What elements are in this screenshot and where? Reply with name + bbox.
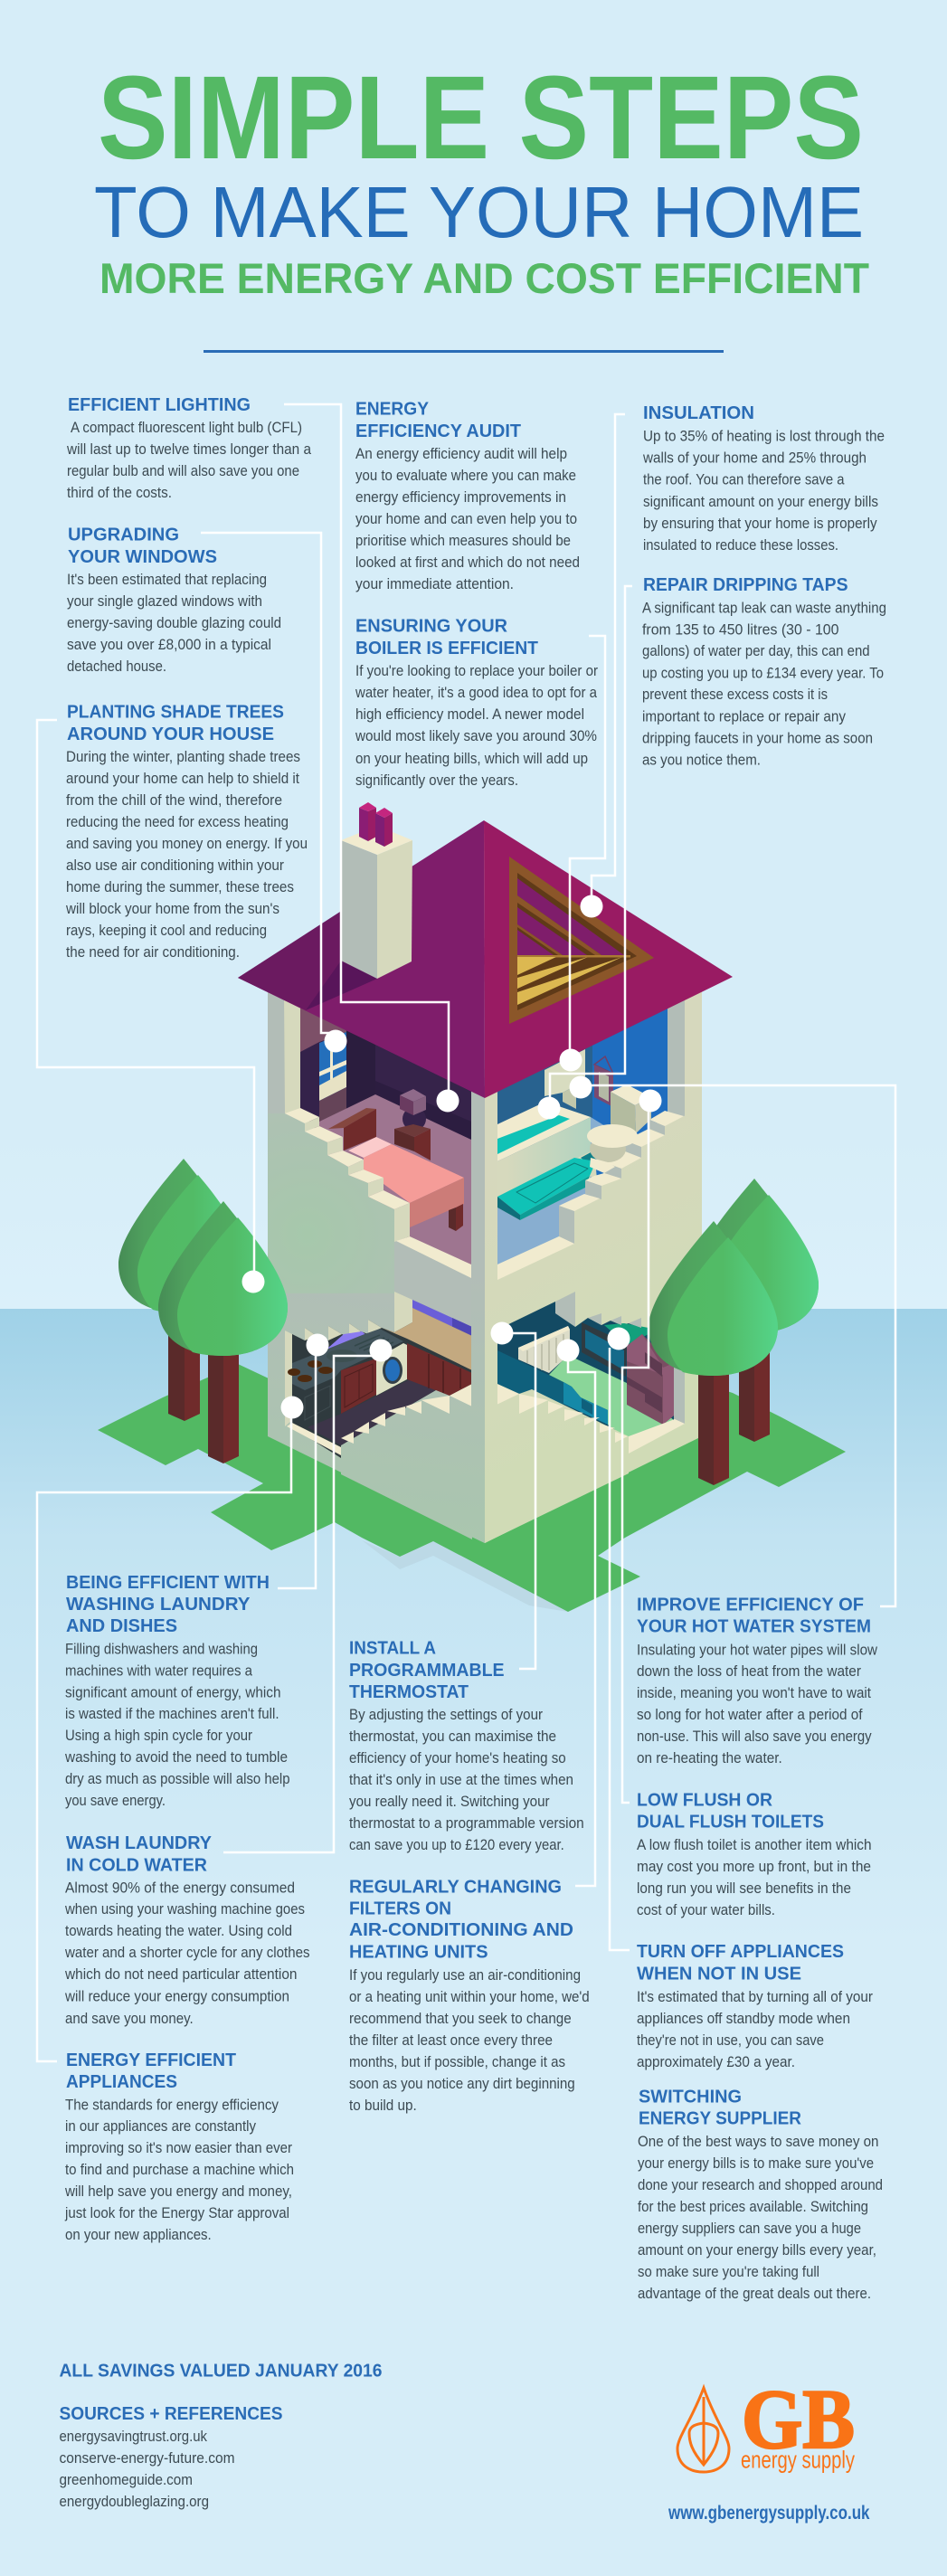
connector lines <box>37 404 895 2061</box>
wall picture <box>594 1056 613 1107</box>
body <box>637 1836 872 1918</box>
icon: flame leaf <box>677 2388 729 2472</box>
body: the need for air conditioning. <box>66 943 240 961</box>
body: thermostat, you can maximise the <box>349 1728 556 1745</box>
body: Almost 90% of the energy consumed <box>65 1880 295 1896</box>
heading: LOW FLUSH OR <box>637 1790 773 1810</box>
body: It's estimated that by turning all of your <box>637 1988 873 2005</box>
body: your energy bills is to make sure you've <box>638 2155 874 2172</box>
kitchen, lower left room <box>285 1292 472 1458</box>
heading: ENSURING YOUR <box>355 617 508 637</box>
house walls <box>268 986 702 1543</box>
body: save you over £8,000 in a typical <box>67 636 271 653</box>
heading: REGULARLY CHANGING <box>349 1878 562 1898</box>
body: the filter at least once every three <box>349 2031 553 2049</box>
body: energy-saving double glazing could <box>67 614 281 631</box>
heading <box>68 525 217 567</box>
toilet <box>587 1084 651 1173</box>
body: to find and purchase a machine which <box>65 2161 294 2178</box>
text block: install a programmable thermostat <box>349 1639 584 1853</box>
body: and save you money. <box>65 2010 194 2027</box>
body: If you're looking to replace your boiler or <box>355 662 598 679</box>
GB Energy Supply logo <box>677 2373 855 2474</box>
heading: IMPROVE EFFICIENCY OF <box>637 1596 864 1615</box>
heading: INSULATION <box>643 403 754 423</box>
body: for the best prices available. Switching <box>638 2198 868 2215</box>
body: energy suppliers can save you a huge <box>638 2220 861 2237</box>
body: significantly over the years. <box>355 772 518 789</box>
body: soon as you notice any dirt beginning <box>349 2075 575 2092</box>
heading <box>67 703 284 744</box>
upper left wall mask <box>268 1113 471 1293</box>
body <box>64 2096 294 2243</box>
ground shadow <box>362 1540 568 1612</box>
curtain <box>346 1029 375 1111</box>
body: by ensuring that your home is properly <box>643 515 877 532</box>
heading <box>355 617 538 658</box>
body: on your heating bills, which will add up <box>355 750 588 767</box>
heading <box>66 1573 270 1636</box>
heading: SWITCHING <box>639 2087 742 2107</box>
website url: www.gbenergysupply.co.uk <box>668 2503 870 2524</box>
body: will last up to twelve times longer than a <box>66 440 311 458</box>
body: so make sure you're taking full <box>638 2263 819 2280</box>
logo letters: GB <box>742 2373 855 2467</box>
heading <box>637 1942 844 1984</box>
body: so long for hot water after a period of <box>637 1706 863 1723</box>
body: During the winter, planting shade trees <box>66 748 300 765</box>
body: significant amount of energy, which <box>65 1684 280 1700</box>
body: Up to 35% of heating is lost through the <box>643 427 885 445</box>
sources heading: SOURCES + REFERENCES <box>60 2404 282 2424</box>
body: high efficiency model. A newer model <box>355 706 584 723</box>
bedside table <box>394 1124 431 1160</box>
text block: improve efficiency of your hot water system <box>637 1596 878 1766</box>
text block: upgrading your windows <box>67 525 281 675</box>
body: energy efficiency improvements in <box>355 488 566 506</box>
connector end dots <box>242 895 662 1418</box>
body: prioritise which measures should be <box>355 532 571 549</box>
heading <box>637 1790 824 1833</box>
body: A low flush toilet is another item which <box>637 1836 872 1853</box>
heading: EFFICIENT LIGHTING <box>68 395 251 415</box>
chimney pot right <box>375 808 393 847</box>
body: One of the best ways to save money on <box>638 2133 879 2150</box>
source list: energysavingtrust.org.uk <box>60 2428 207 2445</box>
tree: front right <box>649 1221 778 1485</box>
body: inside, meaning you won't have to wait <box>637 1684 871 1701</box>
body: approximately £30 a year. <box>637 2053 795 2070</box>
body: advantage of the great deals out there. <box>638 2285 871 2302</box>
body: down the loss of heat from the water <box>637 1662 861 1680</box>
heading: HEATING UNITS <box>349 1943 488 1963</box>
bedroom, upper left room <box>300 995 471 1266</box>
kitchen floor <box>308 1379 436 1445</box>
body: cost of your water bills. <box>637 1901 775 1918</box>
heading: ENERGY SUPPLIER <box>639 2108 802 2128</box>
body: towards heating the water. Using cold <box>65 1922 292 1939</box>
text block: efficient lighting <box>66 395 311 501</box>
body: would most likely save you around 30% <box>355 727 597 744</box>
living room, lower right room <box>497 1292 685 1454</box>
body: efficiency of your home's heating so <box>349 1749 566 1766</box>
body: from 135 to 450 litres (30 - 100 <box>642 620 839 639</box>
heading: ENERGY EFFICIENT <box>66 2050 236 2070</box>
body <box>349 1706 584 1853</box>
body: you save energy. <box>65 1792 166 1809</box>
body: or a heating unit within your home, we'd <box>349 1988 590 2005</box>
body: up costing you up to £134 every year. To <box>642 664 884 682</box>
body: appliances off standby mode when <box>637 2010 850 2027</box>
source list: energydoubleglazing.org <box>60 2493 209 2510</box>
body: on your new appliances. <box>65 2226 212 2243</box>
heading: IN COLD WATER <box>66 1856 208 1876</box>
heading: WHEN NOT IN USE <box>637 1965 801 1984</box>
heading: WASHING LAUNDRY <box>66 1595 251 1615</box>
tree: front left <box>158 1201 288 1463</box>
body <box>349 1966 590 2114</box>
washing machine <box>376 1343 407 1396</box>
body: third of the costs. <box>67 484 172 501</box>
body: water heater, it's a good idea to opt for a <box>355 684 597 701</box>
source list: conserve-energy-future.com <box>60 2449 235 2467</box>
body: washing to avoid the need to tumble <box>64 1748 288 1766</box>
savings date note: ALL SAVINGS VALUED JANUARY 2016 <box>60 2362 382 2382</box>
body: Using a high spin cycle for your <box>65 1727 252 1744</box>
heading: PLANTING SHADE TREES <box>67 703 284 723</box>
shelving unit <box>627 1334 674 1425</box>
tree: back right <box>689 1179 819 1442</box>
body: when using your washing machine goes <box>64 1900 305 1918</box>
body: insulated to reduce these losses. <box>643 536 838 554</box>
stepped wall edges <box>285 1108 684 1280</box>
body: A compact fluorescent light bulb (CFL) <box>71 419 302 436</box>
bed <box>328 1108 464 1231</box>
chimney <box>341 802 412 979</box>
body: to build up. <box>349 2097 417 2114</box>
body: significant amount on your energy bills <box>643 493 878 510</box>
text block: turn off appliances when not in use <box>637 1942 873 2070</box>
window <box>319 1032 346 1102</box>
body: reducing the need for excess heating <box>66 813 289 830</box>
chimney pot left <box>359 802 376 841</box>
body: they're not in use, you can save <box>637 2031 824 2049</box>
text block: ensuring your boiler is efficient <box>355 617 598 789</box>
tree: back left <box>118 1159 248 1421</box>
body <box>64 1641 289 1809</box>
roof skylight window <box>509 857 654 1024</box>
body: will block your home from the sun's <box>65 900 279 917</box>
body: Filling dishwashers and washing <box>65 1641 258 1658</box>
heading <box>637 1596 871 1637</box>
text block: switching energy supplier <box>638 2087 883 2302</box>
body: done your research and shopped around <box>638 2176 883 2193</box>
body: An energy efficiency audit will help <box>355 445 567 462</box>
text block: low flush or dual flush toilets <box>637 1790 872 1918</box>
body: Insulating your hot water pipes will slow <box>637 1641 878 1658</box>
body: long run you will see benefits in the <box>637 1880 851 1897</box>
body: is wasted if the machines aren't full. <box>65 1705 279 1722</box>
body: looked at first and which do not need <box>355 554 580 571</box>
title line 2: TO MAKE YOUR HOME <box>94 172 864 252</box>
body: dripping faucets in your home as soon <box>642 729 873 747</box>
lamp <box>400 1089 426 1131</box>
body: A significant tap leak can waste anything <box>642 599 886 617</box>
body <box>637 1988 873 2070</box>
title line 1: SIMPLE STEPS <box>98 51 864 184</box>
body: If you regularly use an air-conditioning <box>349 1966 581 1984</box>
heading <box>66 2050 236 2092</box>
source list: greenhomeguide.com <box>60 2471 193 2488</box>
body: that it's only in use at the times when <box>349 1771 573 1788</box>
body: also use air conditioning within your <box>66 857 284 874</box>
television <box>582 1322 627 1377</box>
body: your single glazed windows with <box>67 592 262 610</box>
body: rays, keeping it cool and reducing <box>66 922 267 939</box>
body <box>638 2133 883 2302</box>
text block: energy efficiency audit <box>355 400 580 592</box>
body: By adjusting the settings of your <box>349 1706 543 1723</box>
heading: BOILER IS EFFICIENT <box>355 639 538 658</box>
heading: PROGRAMMABLE <box>349 1661 505 1681</box>
roof <box>238 820 733 1098</box>
bath tub front <box>497 1151 596 1220</box>
body: may cost you more up front, but in the <box>637 1858 871 1875</box>
body: around your home can help to shield it <box>66 770 299 787</box>
body: non-use. This will also save you energy <box>637 1728 872 1745</box>
body: from the chill of the wind, therefore <box>66 791 282 809</box>
text block: planting shade trees <box>65 703 308 961</box>
title line 3: MORE ENERGY AND COST EFFICIENT <box>99 255 869 303</box>
source list <box>60 2428 235 2510</box>
body <box>642 599 886 769</box>
isometric house illustration <box>98 802 846 1612</box>
text block: being efficient with washing laundry and dishes <box>64 1573 289 1809</box>
body: will reduce your energy consumption <box>64 1988 289 2004</box>
body: thermostat to a programmable version <box>349 1814 584 1832</box>
heading <box>639 2087 802 2128</box>
heading: AND DISHES <box>66 1616 177 1636</box>
body: you really need it. Switching your <box>349 1793 550 1810</box>
heading: WASH LAUNDRY <box>66 1833 213 1853</box>
body: just look for the Energy Star approval <box>64 2204 289 2221</box>
body: recommend that you seek to change <box>349 2010 572 2027</box>
body: will help save you energy and money, <box>64 2183 292 2200</box>
body: your immediate attention. <box>355 575 514 592</box>
body: the roof. You can therefore save a <box>643 470 845 488</box>
kitchen cabinets <box>407 1343 472 1396</box>
grey inner wall below bedroom <box>394 1242 472 1327</box>
heading <box>66 1833 213 1876</box>
title <box>94 51 869 303</box>
hob and worktop <box>288 1329 403 1390</box>
upper right wall mask <box>497 1108 702 1293</box>
heading: AIR-CONDITIONING AND <box>349 1920 573 1940</box>
heading: FILTERS ON <box>349 1899 451 1918</box>
body: your home and can even help you to <box>355 510 577 527</box>
body <box>64 1880 309 2027</box>
heading: UPGRADING <box>68 525 179 545</box>
bath tub back <box>497 1102 591 1161</box>
text block: insulation <box>642 403 885 554</box>
heading <box>349 1639 505 1702</box>
heading: ENERGY <box>355 400 430 420</box>
body: which do not need particular attention <box>64 1965 297 1983</box>
body: gallons) of water per day, this can end <box>642 642 870 659</box>
corner pillar <box>471 1085 497 1543</box>
body: improving so it's now easier than ever <box>65 2139 292 2156</box>
heading: APPLIANCES <box>66 2072 177 2092</box>
body <box>637 1641 878 1766</box>
heading: DUAL FLUSH TOILETS <box>637 1813 824 1833</box>
body: can save you up to £120 every year. <box>349 1836 564 1853</box>
body: on re-heating the water. <box>637 1749 782 1766</box>
body: prevent these excess costs it is <box>642 686 828 703</box>
body: in our appliances are constantly <box>65 2117 256 2135</box>
body <box>65 748 308 961</box>
logo tagline: energy supply <box>741 2447 855 2474</box>
bathroom, upper right room <box>497 995 668 1264</box>
sources and references <box>60 2404 282 2510</box>
lower kitchen wall edge <box>287 1384 472 1539</box>
body: machines with water requires a <box>65 1662 252 1679</box>
heading: BEING EFFICIENT WITH <box>66 1573 270 1593</box>
body <box>355 445 580 592</box>
oven <box>292 1378 335 1427</box>
body <box>67 571 281 675</box>
body: home during the summer, these trees <box>66 878 294 895</box>
heading: YOUR HOT WATER SYSTEM <box>637 1617 871 1637</box>
body: as you notice them. <box>642 751 761 769</box>
body: walls of your home and 25% through <box>642 449 867 467</box>
door <box>545 1049 585 1109</box>
body: water and a shorter cycle for any clothes <box>64 1944 309 1961</box>
heading: REPAIR DRIPPING TAPS <box>643 575 848 595</box>
body <box>355 662 598 789</box>
text block: energy efficient appliances <box>64 2050 294 2243</box>
radiator <box>518 1326 570 1373</box>
text block: wash laundry in cold water <box>64 1833 309 2027</box>
body: detached house. <box>67 658 166 675</box>
body: The standards for energy efficiency <box>65 2096 279 2113</box>
body <box>66 419 311 501</box>
lower right wall edge <box>497 1384 629 1537</box>
body: and saving you money on energy. If you <box>66 835 308 852</box>
heading: EFFICIENCY AUDIT <box>355 421 521 441</box>
body <box>642 427 885 554</box>
body: amount on your energy bills every year, <box>638 2241 876 2259</box>
body: months, but if possible, change it as <box>349 2053 565 2070</box>
grass island <box>98 1364 846 1612</box>
body: you to evaluate where you can make <box>355 467 576 484</box>
text block: repair dripping taps <box>642 575 886 769</box>
text block: regularly changing filters <box>349 1878 590 2114</box>
heading <box>349 1878 573 1963</box>
heading <box>355 400 521 441</box>
heading: THERMOSTAT <box>349 1682 469 1702</box>
heading: AROUND YOUR HOUSE <box>67 724 274 744</box>
heading: YOUR WINDOWS <box>68 547 217 567</box>
body: important to replace or repair any <box>642 707 846 725</box>
body: dry as much as possible will also help <box>65 1770 289 1787</box>
heading: TURN OFF APPLIANCES <box>637 1942 844 1962</box>
body: It's been estimated that replacing <box>67 571 267 588</box>
heading: INSTALL A <box>349 1639 436 1659</box>
cupboard <box>341 1359 376 1414</box>
body: regular bulb and will also save you one <box>67 462 299 479</box>
